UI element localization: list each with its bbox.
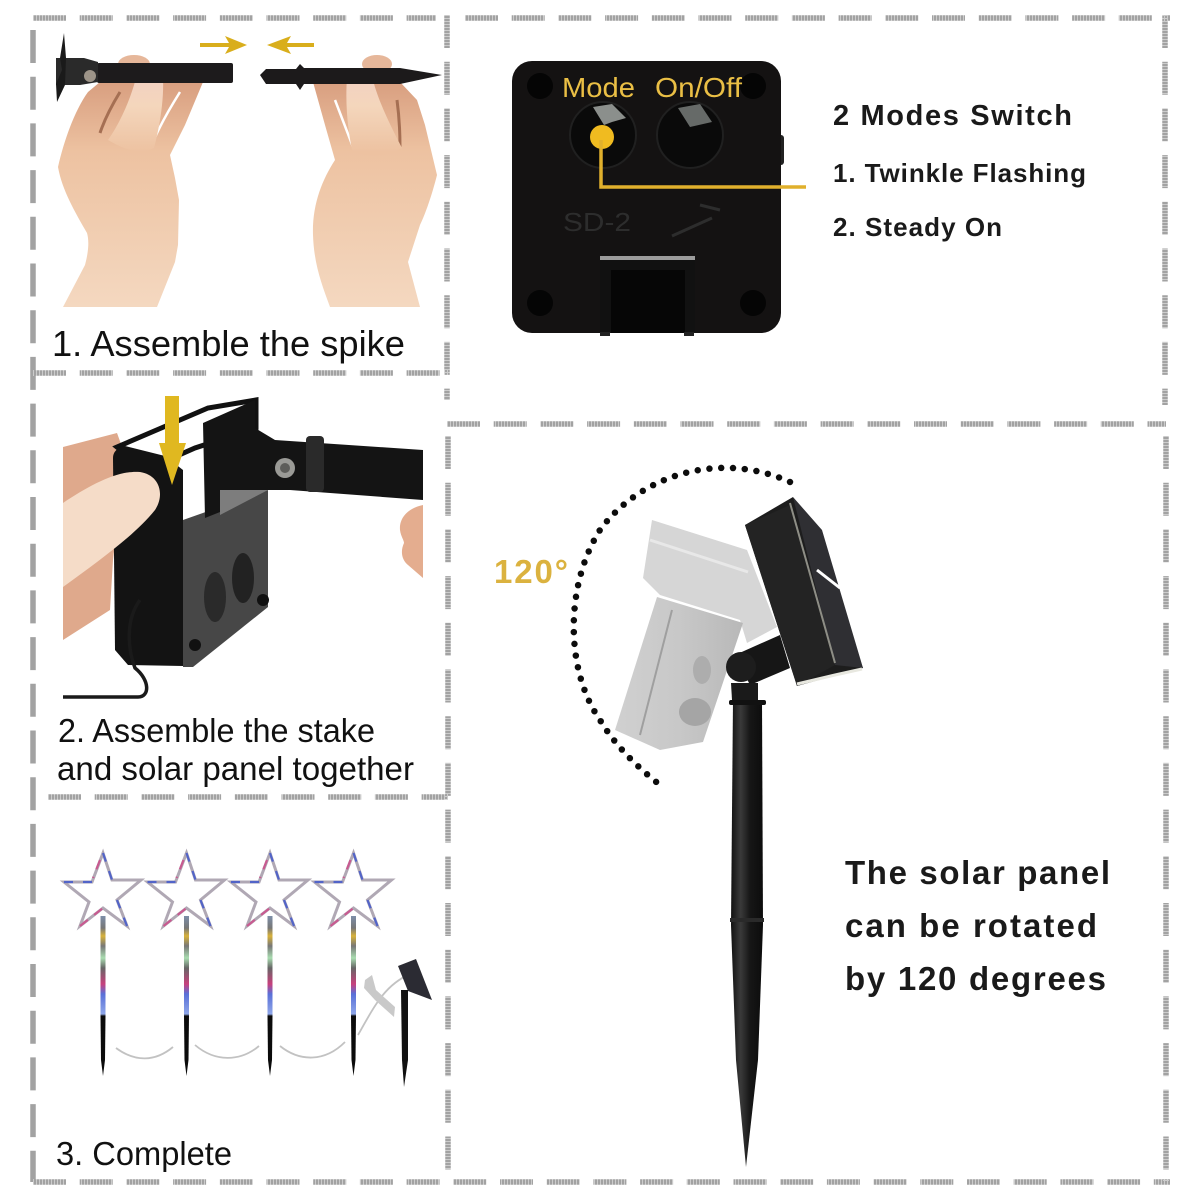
embossed logo [672,205,720,236]
label: On/Off: On/Off [655,72,742,103]
icon: arrow pointing left [267,36,314,54]
caption: step 1: 1. Assemble the spike [52,323,405,364]
left spike tube [56,33,233,102]
caption: step 3: 3. Complete [56,1135,232,1172]
icon: arrow pointing down [159,396,186,485]
label: 120 degrees: 120° [494,553,568,590]
stake [729,700,766,1167]
right hand photo [313,55,437,307]
left hand photo [58,55,203,307]
panel: step 2 assemble stake and solar panel [57,396,423,787]
embossed markings: SD-2 [563,207,631,237]
panel: step 3 complete [56,853,432,1172]
button: on/off [657,102,723,168]
solar panel edge [117,400,256,470]
caption: step 2 line 2: and solar panel together [57,750,414,787]
battery box [63,446,269,697]
ghost panel lower [615,597,743,750]
text: rotation line 3: by 120 degrees [845,960,1106,997]
feature: twinkle flashing: 1. Twinkle Flashing [833,158,1086,188]
label: Mode: Mode [562,72,635,103]
mini solar stake [364,959,432,1087]
fingers right [400,505,423,578]
text: rotation line 1: The solar panel [845,854,1110,891]
connecting wires [116,974,410,1058]
star stake 4 [314,853,392,1076]
control box back [512,61,781,333]
caption: step 2 line 1: 2. Assemble the stake [58,712,375,749]
button: mode [570,102,636,168]
hand photo left [63,433,125,640]
bracket and arm [203,400,423,518]
heading: 2 modes switch: 2 Modes Switch [833,100,1072,132]
star stake 3 [231,853,308,1076]
mounting slot [600,256,695,336]
panel: mode switch [512,61,1086,336]
icon: arrow pointing right [200,36,247,54]
panel: step 1 assemble the spike [52,33,442,364]
star stake 2 [148,853,224,1076]
star stake 1 [64,853,141,1076]
text: rotation line 2: can be rotated [845,907,1097,944]
feature: steady on: 2. Steady On [833,212,1002,242]
ghost panel upper [643,520,777,643]
side bump [778,135,784,165]
pivot joint [726,635,790,700]
corner screw holes [527,73,766,316]
thumb over box [63,472,160,587]
mode callout line and dot [590,125,806,187]
dotted rotation arc [574,468,790,785]
right spike [260,64,442,90]
solar panel [745,497,863,686]
panel: solar panel rotation [494,468,1110,1167]
